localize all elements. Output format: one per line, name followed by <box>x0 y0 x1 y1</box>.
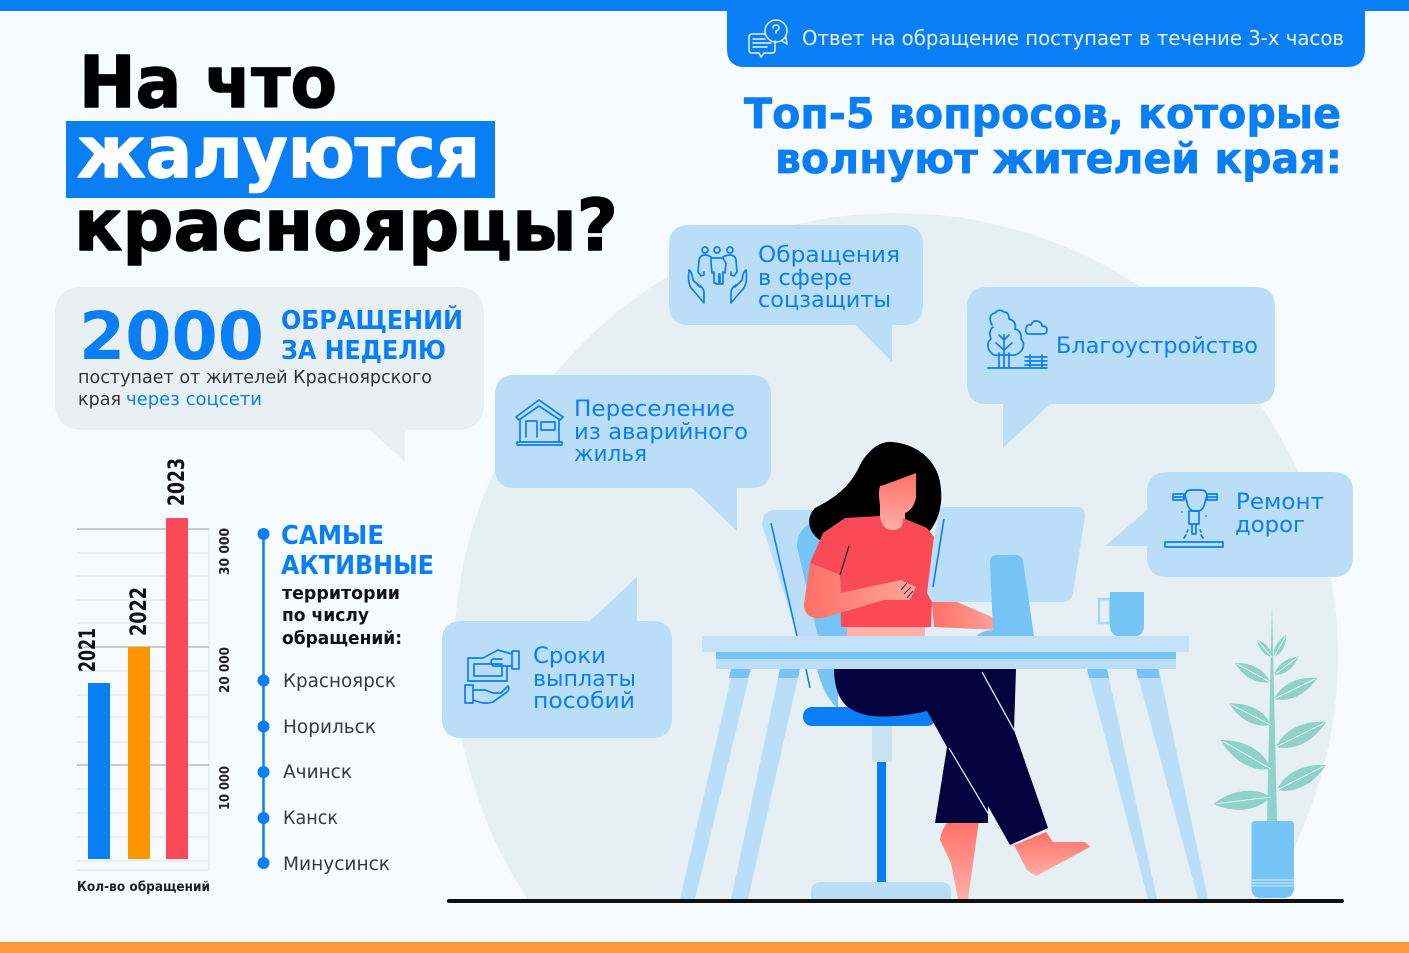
arm right <box>932 602 999 630</box>
year labels: 2021 <box>76 628 101 672</box>
title: На что <box>79 41 337 124</box>
icon: park <box>988 310 1047 368</box>
year labels: 2022 <box>127 587 152 636</box>
axis caption: Кол-во обращений <box>77 880 210 895</box>
timeline: most active territories: Канск <box>283 807 338 829</box>
title: красноярцы? <box>74 184 618 267</box>
icon: house <box>516 400 563 445</box>
timeline: most active territories: Красноярск <box>283 670 396 692</box>
timeline: most active territories: АКТИВНЫЕ <box>281 551 434 581</box>
callout: 2000 appeals <box>55 287 484 462</box>
desk top <box>702 636 1189 669</box>
bubble: road repair: Ремонт <box>1236 490 1324 515</box>
background circle <box>454 213 1338 900</box>
bottom bar <box>0 942 1409 953</box>
icon: people in hands <box>688 247 746 303</box>
midriff <box>847 625 925 636</box>
title <box>66 41 618 267</box>
callout: 2000 appeals: 2000 <box>79 298 264 375</box>
bubble: resettlement: Переселение <box>574 397 735 422</box>
bubble: payments <box>442 577 672 738</box>
timeline: most active territories: территории <box>282 583 400 604</box>
icon: money in hands <box>465 650 519 703</box>
bar 2022 <box>128 647 150 859</box>
timeline: most active territories: Минусинск <box>283 853 390 875</box>
callout: 2000 appeals: через соцсети <box>126 390 262 410</box>
callout: 2000 appeals: ОБРАЩЕНИЙ <box>281 304 463 336</box>
chair seat and base <box>803 707 951 899</box>
callout: 2000 appeals: края <box>78 390 121 410</box>
bubble: social protection <box>669 225 923 362</box>
icon: jackhammer <box>1165 490 1223 547</box>
desk legs <box>680 669 1208 899</box>
bubble: road repair: дорог <box>1235 513 1305 538</box>
timeline: most active territories: Ачинск <box>283 761 352 783</box>
callout: 2000 appeals: ЗА НЕДЕЛЮ <box>281 336 446 366</box>
back foot <box>940 820 979 899</box>
axis labels: 10 000 <box>218 766 233 810</box>
heading: top 5 <box>744 89 1342 183</box>
monitor <box>925 507 1085 602</box>
bubble: social protection: в сфере <box>758 266 852 291</box>
bubble: payments: Сроки <box>533 644 606 669</box>
trousers <box>834 669 1048 845</box>
year labels <box>76 458 190 672</box>
hair <box>809 442 941 542</box>
heading: top 5: волнуют жителей края: <box>775 134 1342 183</box>
timeline: most active territories: Норильск <box>283 716 376 738</box>
illustration: woman at desk <box>680 442 1208 899</box>
heading: top 5: Топ-5 вопросов, которые <box>744 89 1341 138</box>
chair back <box>762 510 860 710</box>
neck and face <box>879 473 916 530</box>
bubble: resettlement <box>495 375 771 531</box>
axis labels <box>218 528 233 810</box>
bubble: landscaping: Благоустройство <box>1056 334 1258 359</box>
bubble: social protection: Обращения <box>758 243 900 268</box>
callout: 2000 appeals: поступает от жителей Красноярского <box>78 368 432 388</box>
laptop <box>977 555 1034 636</box>
timeline: most active territories <box>258 521 434 875</box>
arm left <box>804 563 916 618</box>
bubble: resettlement: из аварийного <box>574 420 748 445</box>
mug <box>1099 592 1144 637</box>
pot <box>1252 821 1294 898</box>
bubble: resettlement: жилья <box>574 442 647 467</box>
bubble: landscaping <box>967 287 1275 448</box>
timeline: most active territories: САМЫЕ <box>281 521 384 551</box>
top bar <box>0 0 1409 11</box>
timeline: most active territories: по числу <box>282 605 369 626</box>
axis labels: 20 000 <box>218 647 233 693</box>
year labels: 2023 <box>165 458 190 506</box>
plant <box>1212 603 1330 898</box>
bar 2023 <box>166 518 188 859</box>
shirt <box>810 516 934 627</box>
response time banner <box>727 11 1365 67</box>
axis labels: 30 000 <box>218 528 233 575</box>
title: жалуются <box>77 111 480 194</box>
banner text: Ответ на обращение поступает в течение 3-х часов <box>802 26 1344 50</box>
bubble: payments: пособий <box>533 689 635 714</box>
ground line <box>447 899 1344 903</box>
bar 2021 <box>88 683 110 859</box>
bubble: road repair <box>1105 472 1353 577</box>
timeline: most active territories: обращений: <box>282 628 402 649</box>
icon: chat with question <box>749 20 787 57</box>
bar chart <box>76 458 233 895</box>
bubble: social protection: соцзащиты <box>758 288 891 313</box>
front foot <box>1014 832 1090 876</box>
bubble: payments: выплаты <box>533 667 636 692</box>
